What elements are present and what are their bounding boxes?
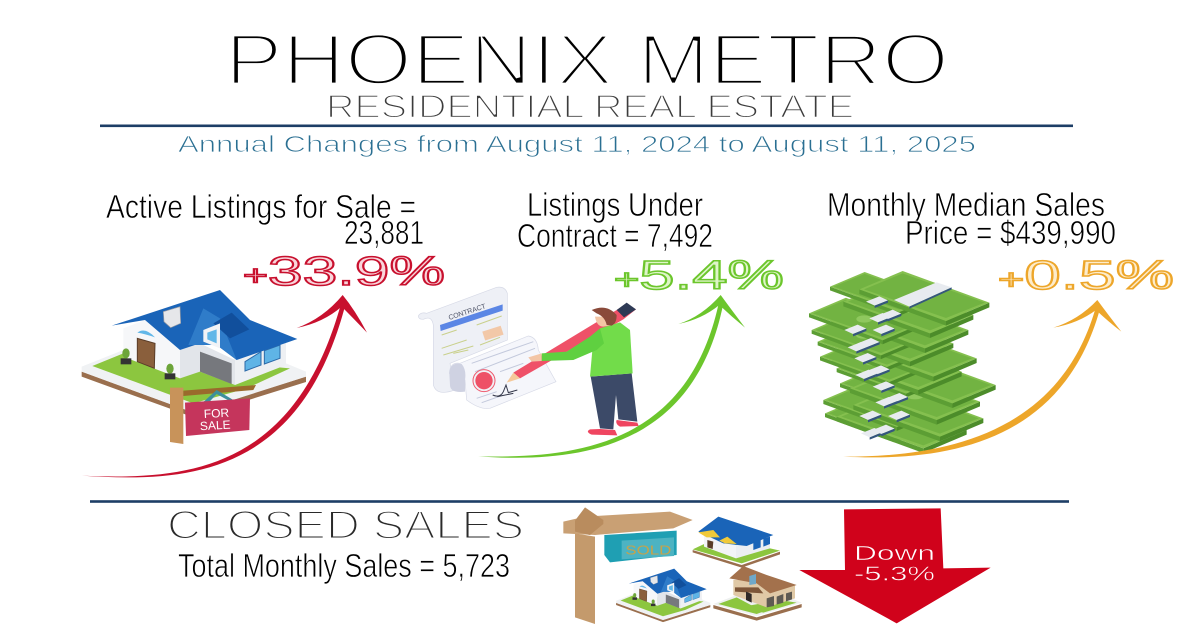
median price heading: Monthly Median Sales bbox=[827, 186, 1105, 223]
title: PHOENIX METRO bbox=[225, 20, 949, 100]
median price percent change: +0.5% bbox=[998, 252, 1174, 298]
active listings percent change: +33.9% bbox=[243, 248, 445, 294]
icon: person signing contract bbox=[418, 287, 639, 435]
arrow: red growth bbox=[82, 295, 367, 477]
total monthly sales: Total Monthly Sales = 5,723 bbox=[178, 547, 510, 584]
icon: person signing contract: CONTRACT bbox=[448, 303, 488, 322]
panel: median sales price bbox=[809, 186, 1174, 457]
under contract heading bbox=[517, 186, 713, 254]
closed sales heading: CLOSED SALES bbox=[167, 504, 524, 548]
panel: active listings bbox=[82, 188, 445, 477]
arrow: orange growth bbox=[843, 300, 1121, 457]
small blue house bbox=[693, 517, 780, 568]
icon: stack of cash bbox=[809, 271, 996, 453]
median price heading bbox=[827, 186, 1116, 251]
icon: house for sale bbox=[82, 290, 306, 444]
panel: listings under contract bbox=[418, 186, 784, 458]
panel: closed sales bbox=[167, 504, 991, 624]
under contract heading: Contract = 7,492 bbox=[517, 217, 713, 254]
small brown house bbox=[713, 566, 802, 621]
active listings heading: 23,881 bbox=[344, 214, 424, 251]
under contract heading: Listings Under bbox=[527, 186, 703, 223]
arrow: down 5.3 percent: Down bbox=[854, 543, 935, 565]
icon: house for sale: FOR bbox=[203, 406, 230, 421]
arrow: down 5.3 percent: -5.3% bbox=[854, 564, 935, 586]
icon: sold sign with houses bbox=[563, 507, 802, 624]
under contract percent change: +5.4% bbox=[614, 252, 784, 298]
arrow: green growth bbox=[478, 295, 745, 458]
active listings heading: Active Listings for Sale = bbox=[106, 188, 416, 225]
arrow: down 5.3 percent bbox=[799, 508, 991, 623]
icon: sold sign with houses: SOLD bbox=[625, 543, 671, 558]
subtitle: RESIDENTIAL REAL ESTATE bbox=[326, 88, 854, 124]
active listings heading bbox=[106, 188, 424, 251]
median price heading: Price = $439,990 bbox=[905, 214, 1116, 251]
date range text: Annual Changes from August 11, 2024 to August 11, 2025 bbox=[178, 131, 976, 157]
icon: house for sale: SALE bbox=[200, 418, 231, 433]
